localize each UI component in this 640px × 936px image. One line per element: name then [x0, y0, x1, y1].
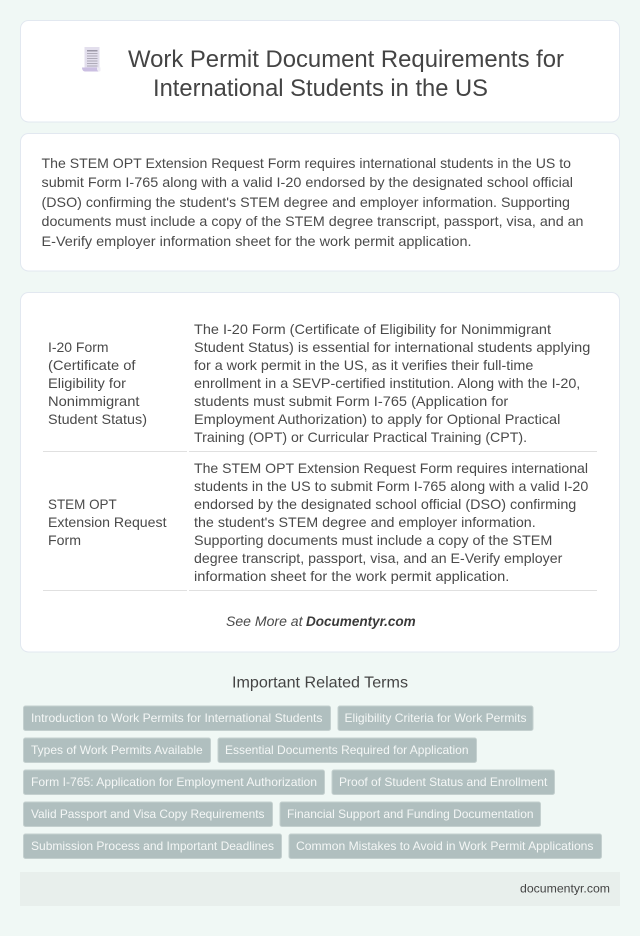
tag list: related terms [24, 706, 602, 858]
table cell: I-20 Form description: enrollment in a SEVP-certified institution. Along with the I-20, [194, 375, 580, 391]
panel: document table [20, 292, 620, 652]
table cell: I-20 Form description: Student Status) is essential for international students applying [194, 339, 590, 355]
tag: submission process [24, 834, 282, 858]
tag: passport and visa [24, 802, 272, 826]
table cell: STEM OPT description: information sheet for the work permit application. [194, 568, 509, 584]
table cell: I-20 Form description: Training (OPT) or Curricular Practical Training (CPT). [194, 429, 527, 445]
table cell: I-20 Form name: (Certificate of [48, 357, 136, 373]
tag: financial support [280, 802, 540, 826]
tag: proof of status [332, 770, 554, 794]
tag: introduction: Introduction to Work Permits for International Students [31, 711, 322, 725]
tag: passport and visa: Valid Passport and Visa Copy Requirements [31, 807, 264, 821]
tag: eligibility [338, 706, 533, 730]
heading: title [128, 46, 564, 102]
table cell: I-20 Form description: for a work permit in the US, as it verifies their full-time [194, 357, 534, 373]
table cell: STEM OPT name [48, 496, 167, 548]
table row: I-20 Form [48, 321, 590, 445]
heading: important related terms: Important Related Terms [232, 674, 408, 692]
table cell: STEM OPT name: STEM OPT [48, 496, 117, 512]
table cell: I-20 Form name [48, 339, 147, 427]
tag: form I-765 [24, 770, 324, 794]
table cell: STEM OPT description: The STEM OPT Extension Request Form requires international [194, 460, 588, 476]
panel: summary paragraph [20, 134, 620, 271]
table cell: I-20 Form description: students must submit Form I-765 (Application for [194, 393, 509, 409]
tag: proof of status: Proof of Student Status and Enrollment [339, 775, 548, 789]
text block: summary: documents must include a copy of the STEM degree transcript, passport, visa, and an [42, 213, 584, 229]
tag: form I-765: Form I-765: Application for Employment Authorization [31, 775, 317, 789]
text block: summary: The STEM OPT Extension Request Form requires international students in the US to [42, 155, 571, 171]
table cell: STEM OPT description: the student's STEM degree and employer information. [194, 514, 536, 530]
table cell: I-20 Form description: The I-20 Form (Certificate of Eligibility for Nonimmigrant [194, 321, 551, 337]
link: see more: Documentyr.com [306, 613, 416, 629]
icon: document scroll [82, 47, 100, 72]
footer text: site name: documentyr.com [520, 882, 610, 896]
tag: common mistakes: Common Mistakes to Avoid in Work Permit Applications [296, 839, 594, 853]
table cell: I-20 Form description: Employment Authorization) to apply for Optional Practical [194, 411, 560, 427]
table cell: I-20 Form name: Nonimmigrant [48, 393, 140, 409]
table cell: I-20 Form description [194, 321, 590, 445]
text block: summary: submit Form I-765 along with a valid I-20 endorsed by the designated school official [42, 174, 573, 190]
footer bar [20, 872, 620, 906]
text block: summary [42, 155, 584, 249]
heading: title: International Students in the US [153, 75, 488, 102]
tag: common mistakes [289, 834, 602, 858]
tag: essential documents: Essential Documents Required for Application [225, 743, 468, 757]
table cell: STEM OPT name: Extension Request [48, 514, 167, 530]
tag: submission process: Submission Process and Important Deadlines [31, 839, 274, 853]
tag: introduction [24, 706, 330, 730]
tag: types: Types of Work Permits Available [31, 743, 203, 757]
table cell: STEM OPT description: degree transcript, passport, visa, and an E-Verify employer [194, 550, 563, 566]
tag: types [24, 738, 210, 762]
table cell: STEM OPT description: endorsed by the designated school official (DSO) confirming [194, 496, 576, 512]
table cell: I-20 Form name: Student Status) [48, 411, 147, 427]
text block: summary: E-Verify employer information sheet for the work permit application. [42, 233, 471, 249]
table cell: STEM OPT description [194, 460, 589, 584]
tag: financial support: Financial Support and Funding Documentation [287, 807, 534, 821]
text block: summary: (DSO) confirming the student's STEM degree and employer information. Supporting [42, 194, 570, 210]
table cell: STEM OPT description: Supporting documents must include a copy of the STEM [194, 532, 552, 548]
tag: essential documents [218, 738, 476, 762]
tag: eligibility: Eligibility Criteria for Work Permits [344, 711, 526, 725]
panel: title card [20, 20, 620, 122]
link: see more [226, 613, 416, 629]
heading: title: Work Permit Document Requirements for [128, 46, 564, 73]
table cell: I-20 Form name: I-20 Form [48, 339, 108, 355]
link: see more: See More at [226, 613, 304, 629]
table cell: STEM OPT name: Form [48, 532, 81, 548]
table cell: I-20 Form name: Eligibility for [48, 375, 126, 391]
table cell: STEM OPT description: students in the US to submit Form I-765 along with a valid I-20 [194, 478, 589, 494]
table row: STEM OPT Extension Request Form [48, 460, 589, 584]
